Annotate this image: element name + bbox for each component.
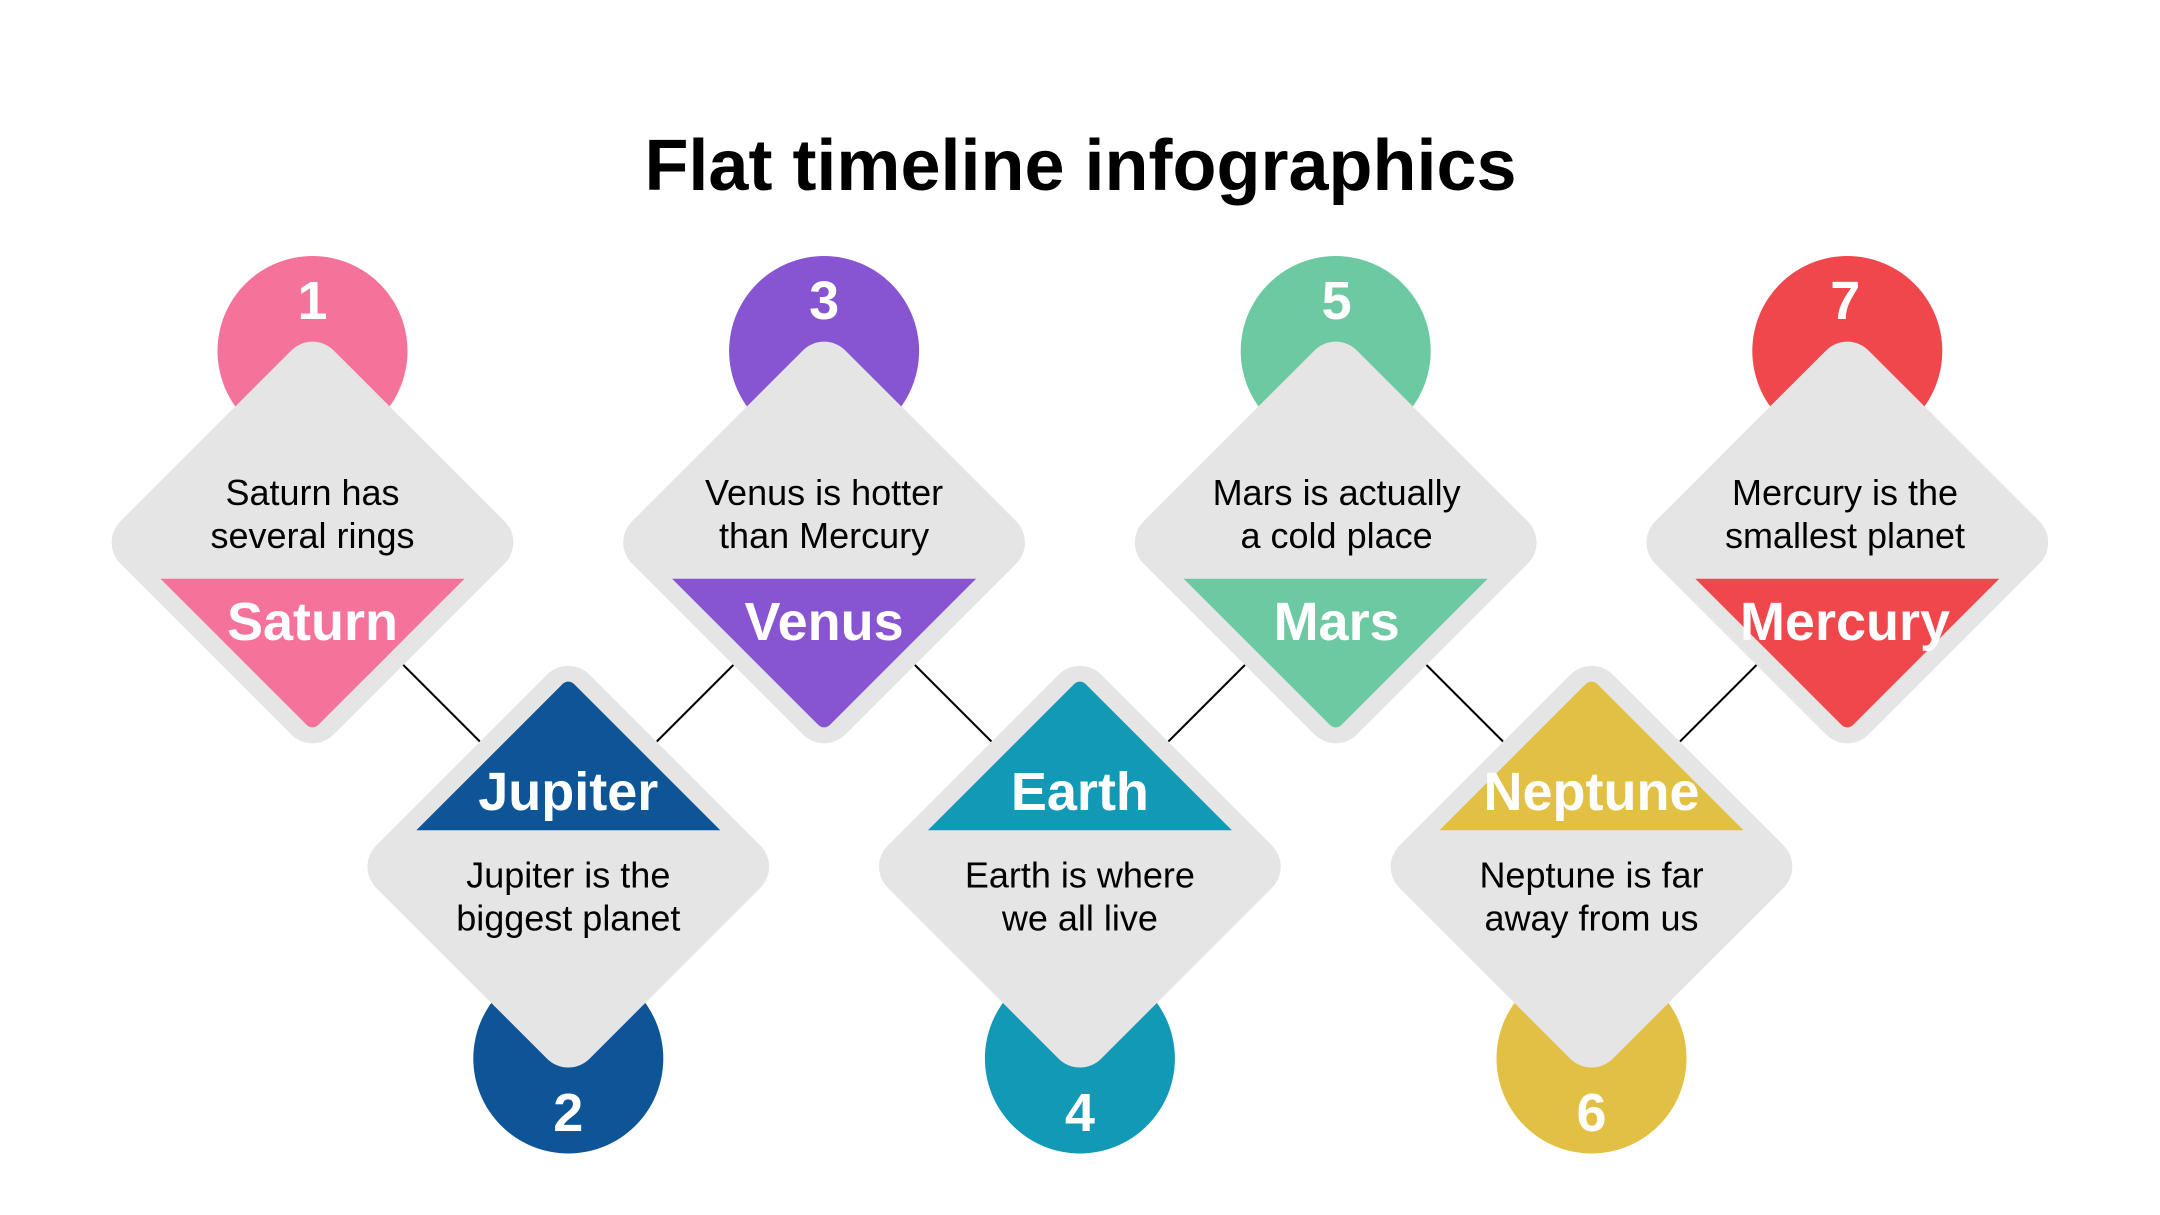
grey diamond (355, 653, 782, 1080)
description: a cold place (1241, 515, 1433, 556)
panel: step 5 Mars (1122, 256, 1549, 756)
panel: step 1 Saturn (99, 256, 526, 756)
description: we all live (1001, 898, 1158, 938)
coloured triangle (1184, 579, 1488, 727)
number 5: 5 (1322, 271, 1352, 331)
grey diamond (1122, 329, 1549, 756)
coloured triangle (1695, 579, 1999, 727)
description: biggest planet (456, 898, 680, 938)
description: than Mercury (719, 515, 929, 556)
description: several rings (210, 515, 415, 556)
grey diamond (611, 329, 1037, 756)
coloured triangle (672, 579, 976, 727)
coloured triangle (416, 682, 720, 830)
planet name: Neptune (1484, 762, 1700, 822)
description: away from us (1484, 898, 1699, 938)
number circle 6 (1496, 964, 1686, 1154)
connector lines between the steps (403, 664, 1757, 742)
planet name: Mars (1274, 592, 1400, 652)
grey diamond (99, 329, 526, 756)
number 6: 6 (1576, 1083, 1607, 1143)
description: smallest planet (1725, 515, 1965, 556)
description: Earth is where (965, 854, 1195, 896)
number circle 5 (1241, 256, 1431, 446)
grey diamond (1634, 329, 2061, 756)
number 7: 7 (1830, 271, 1860, 331)
planet name: Saturn (227, 592, 398, 652)
number circle 4 (985, 964, 1175, 1154)
grey diamond (867, 653, 1293, 1080)
title: Flat timeline infographics (644, 126, 1517, 206)
panel: step 2 Jupiter (355, 653, 782, 1154)
planet name: Venus (745, 592, 904, 652)
number circle 3 (729, 256, 919, 446)
number 3: 3 (809, 271, 839, 331)
description: Mercury is the (1732, 472, 1958, 513)
number 2: 2 (553, 1083, 583, 1143)
description: Saturn has (225, 472, 400, 513)
coloured triangle (1440, 682, 1744, 830)
panel: step 6 Neptune (1378, 653, 1805, 1154)
description: Mars is actually (1213, 472, 1461, 513)
number 4: 4 (1065, 1083, 1095, 1143)
panel: step 7 Mercury (1634, 256, 2061, 756)
panel: step 4 Earth (867, 653, 1293, 1154)
panel: step 3 Venus (611, 256, 1037, 756)
coloured triangle (928, 682, 1232, 830)
planet name: Earth (1011, 762, 1149, 822)
number circle 7 (1752, 256, 1942, 446)
description: Jupiter is the (466, 854, 670, 896)
planet name: Jupiter (478, 762, 658, 822)
number 1: 1 (297, 271, 328, 331)
number circle 2 (473, 964, 663, 1154)
coloured triangle (160, 579, 464, 727)
planet name: Mercury (1740, 592, 1950, 652)
grey diamond (1378, 653, 1805, 1080)
number circle 1 (218, 256, 408, 446)
description: Venus is hotter (705, 472, 943, 513)
description: Neptune is far (1479, 854, 1704, 896)
